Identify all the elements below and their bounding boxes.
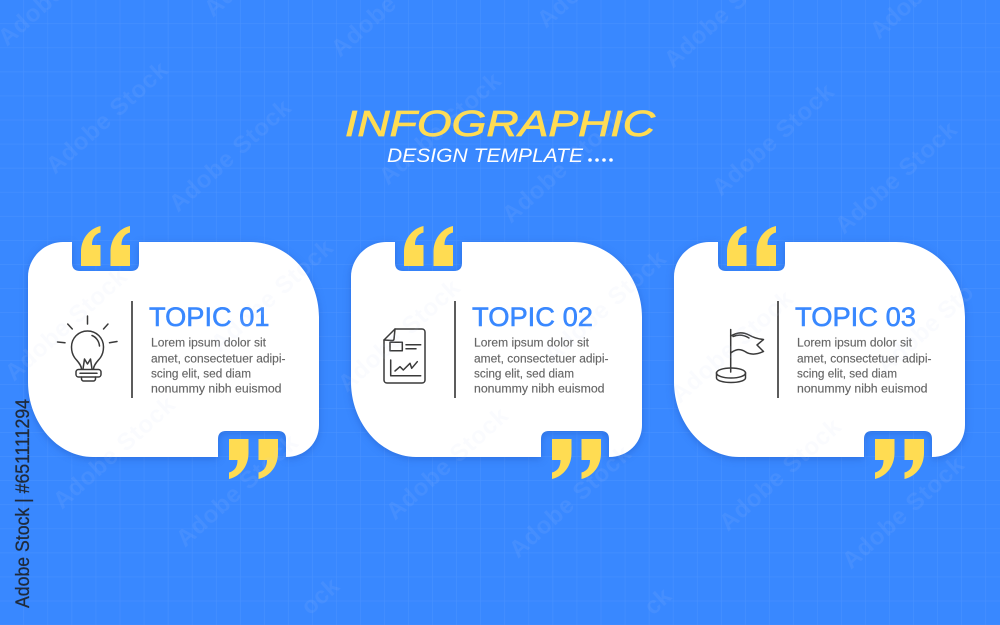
text block [151,336,286,396]
watermark pattern: Adobe Stock [374,67,507,190]
icon: document with chart [384,329,425,383]
watermark pattern: Adobe Stock [707,78,840,201]
watermark pattern: Adobe Sto [872,279,979,379]
panel: topic 02 [351,226,642,479]
text block: amet, consectetuer adipi- [797,351,932,365]
icon: opening quote [81,226,130,266]
icon: flag on golf hole [716,330,764,382]
watermark pattern: Adobe Stock [0,263,133,386]
watermark pattern: Adobe Stock [171,429,304,552]
watermark pattern: ock [296,572,345,620]
watermark pattern: Adobe Stock [830,116,963,239]
title [345,103,656,167]
watermark pattern: Adobe Stock [504,440,637,563]
icon: light bulb [58,316,117,381]
heading: topic 01: TOPIC 01 [149,302,270,332]
text block: nonummy nibh euismod [797,382,928,396]
watermark pattern: Adobe Stock [666,285,799,408]
heading: topic 02: TOPIC 02 [472,302,593,332]
icon: closing quote [229,439,278,479]
card background [674,242,965,457]
text block [797,336,932,396]
text block: scing elit, sed diam [474,367,574,381]
divider [777,301,779,398]
watermark pattern: Adobe Stock [206,234,339,357]
watermark pattern: Adobe Stock [539,245,672,368]
watermark pattern: Adobe Stock [333,274,466,397]
panel: topic 03 [674,226,965,479]
text block: scing elit, sed diam [151,367,251,381]
text block: Lorem ipsum dolor sit [797,336,913,350]
text block: amet, consectetuer adipi- [151,351,286,365]
card background [351,242,642,457]
heading: topic 03: TOPIC 03 [795,302,916,332]
watermark pattern: ck [639,582,677,620]
watermark pattern: Adobe Stock [714,413,847,536]
watermark pattern: Adobe Stock [381,402,514,525]
watermark pattern: Adobe Stock [48,391,181,514]
text block: amet, consectetuer adipi- [474,351,608,365]
icon: opening quote [404,226,453,266]
stock id label: Adobe Stock | #651111294 [13,399,34,608]
text block: nonummy nibh euismod [151,382,282,396]
heading: infographic: INFOGRAPHIC [345,103,656,144]
text block: scing elit, sed diam [797,367,897,381]
watermark pattern: Adobe Stock [164,94,297,217]
text block [474,336,608,396]
icon: closing quote [875,439,924,479]
watermark pattern: Adobe Stock [497,105,630,228]
divider [454,301,456,398]
text block: Lorem ipsum dolor sit [151,336,267,350]
text block: Lorem ipsum dolor sit [474,336,590,350]
watermark pattern: Adobe Stock [41,56,174,179]
divider [131,301,133,398]
text block: nonummy nibh euismod [474,382,604,396]
card background [28,242,319,457]
icon: closing quote [552,439,601,479]
icon: opening quote [727,226,776,266]
subheading: design template: DESIGN TEMPLATE [387,146,583,167]
watermark pattern: Adobe Stock [837,451,970,574]
panel: topic 01 [28,226,319,479]
